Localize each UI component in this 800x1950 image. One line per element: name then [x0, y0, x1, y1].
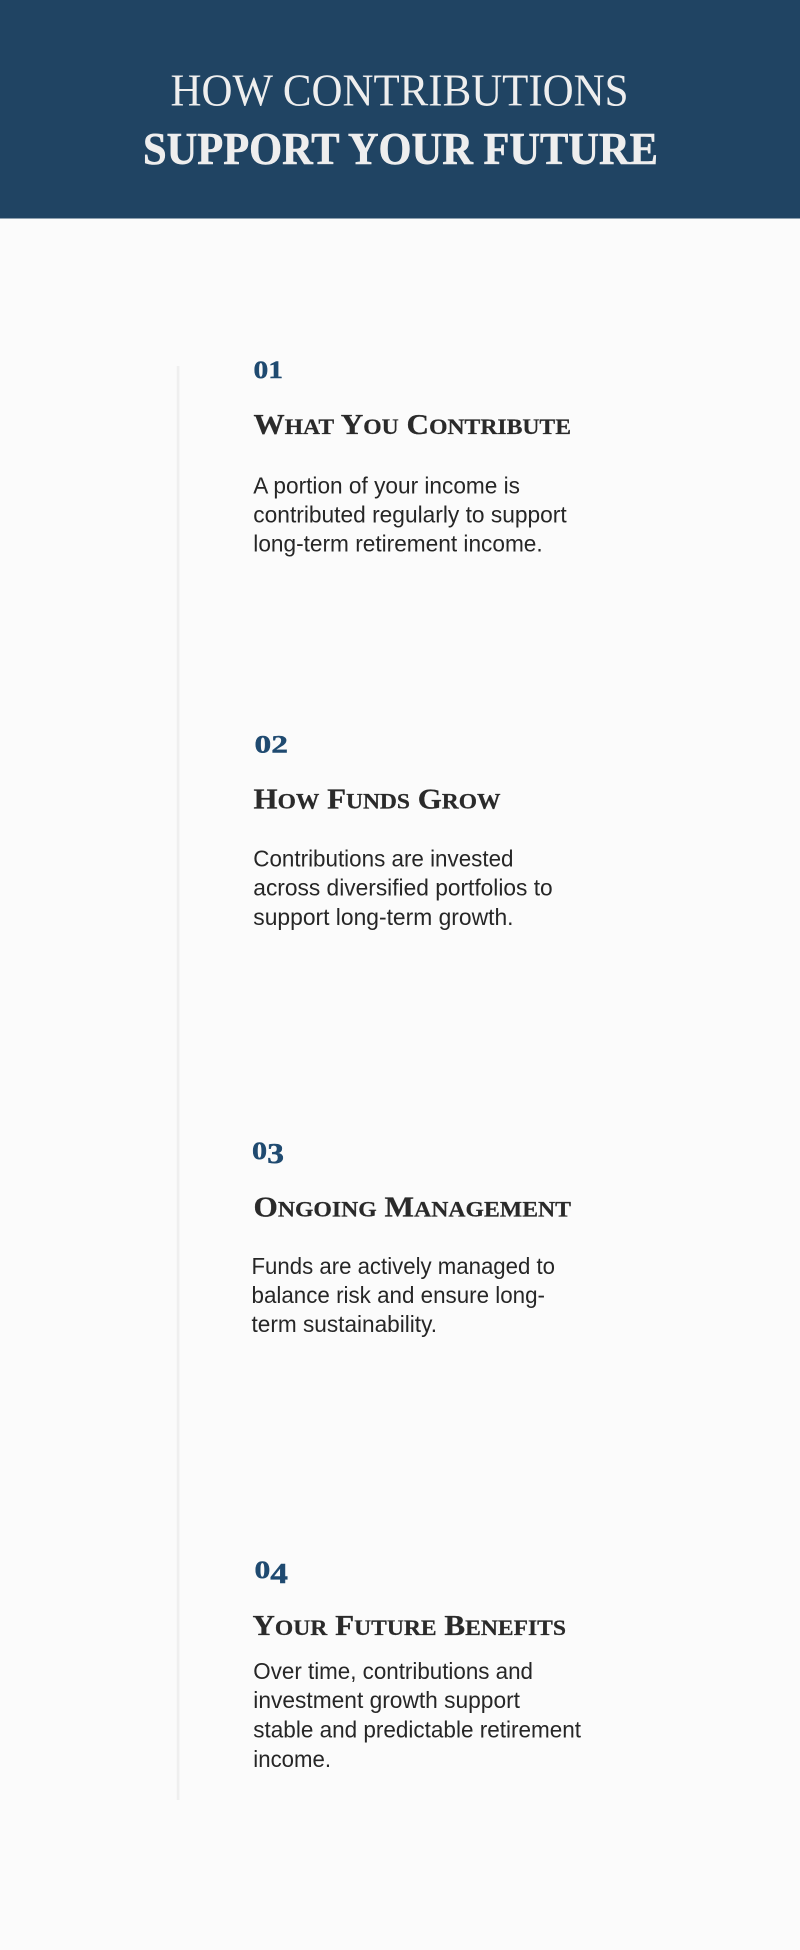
step 03	[252, 1138, 571, 1337]
step 01	[253, 357, 571, 556]
header banner	[0, 0, 800, 218]
step heading: Your Future Benefits	[252, 1606, 566, 1642]
step description: support long-term growth.	[253, 904, 514, 930]
step description: Over time, contributions and	[253, 1658, 533, 1684]
step heading: What You Contribute	[254, 405, 571, 441]
step description: contributed regularly to support	[253, 501, 567, 527]
step description: Contributions are invested	[253, 846, 514, 872]
step description: A portion of your income is	[253, 472, 520, 498]
step description: income.	[253, 1746, 331, 1772]
step description: term sustainability.	[252, 1311, 437, 1337]
step number 02: 02	[254, 732, 288, 759]
step description	[253, 846, 553, 930]
timeline vertical line	[177, 366, 179, 1800]
step description: long-term retirement income.	[253, 530, 543, 556]
step description: across diversified portfolios to	[253, 875, 553, 901]
step description: investment growth support	[253, 1687, 520, 1713]
step description	[253, 472, 567, 556]
step description: balance risk and ensure long-	[252, 1282, 545, 1308]
step description: stable and predictable retirement	[253, 1716, 581, 1742]
title	[143, 65, 658, 174]
step number 03: 3	[267, 1139, 284, 1170]
step heading: Ongoing Management	[254, 1188, 571, 1224]
step 02	[253, 732, 553, 930]
step description	[253, 1658, 581, 1772]
step number 04: 0	[254, 1557, 267, 1584]
step number 01: 01	[254, 357, 283, 384]
step description	[252, 1253, 555, 1337]
step description: Funds are actively managed to	[252, 1253, 555, 1279]
step 04	[252, 1557, 581, 1772]
title: HOW CONTRIBUTIONS	[170, 65, 628, 116]
step heading: How Funds Grow	[254, 780, 500, 816]
step number 04: 4	[270, 1559, 288, 1590]
step number 03: 0	[252, 1138, 264, 1165]
title: SUPPORT YOUR FUTURE	[143, 123, 658, 174]
